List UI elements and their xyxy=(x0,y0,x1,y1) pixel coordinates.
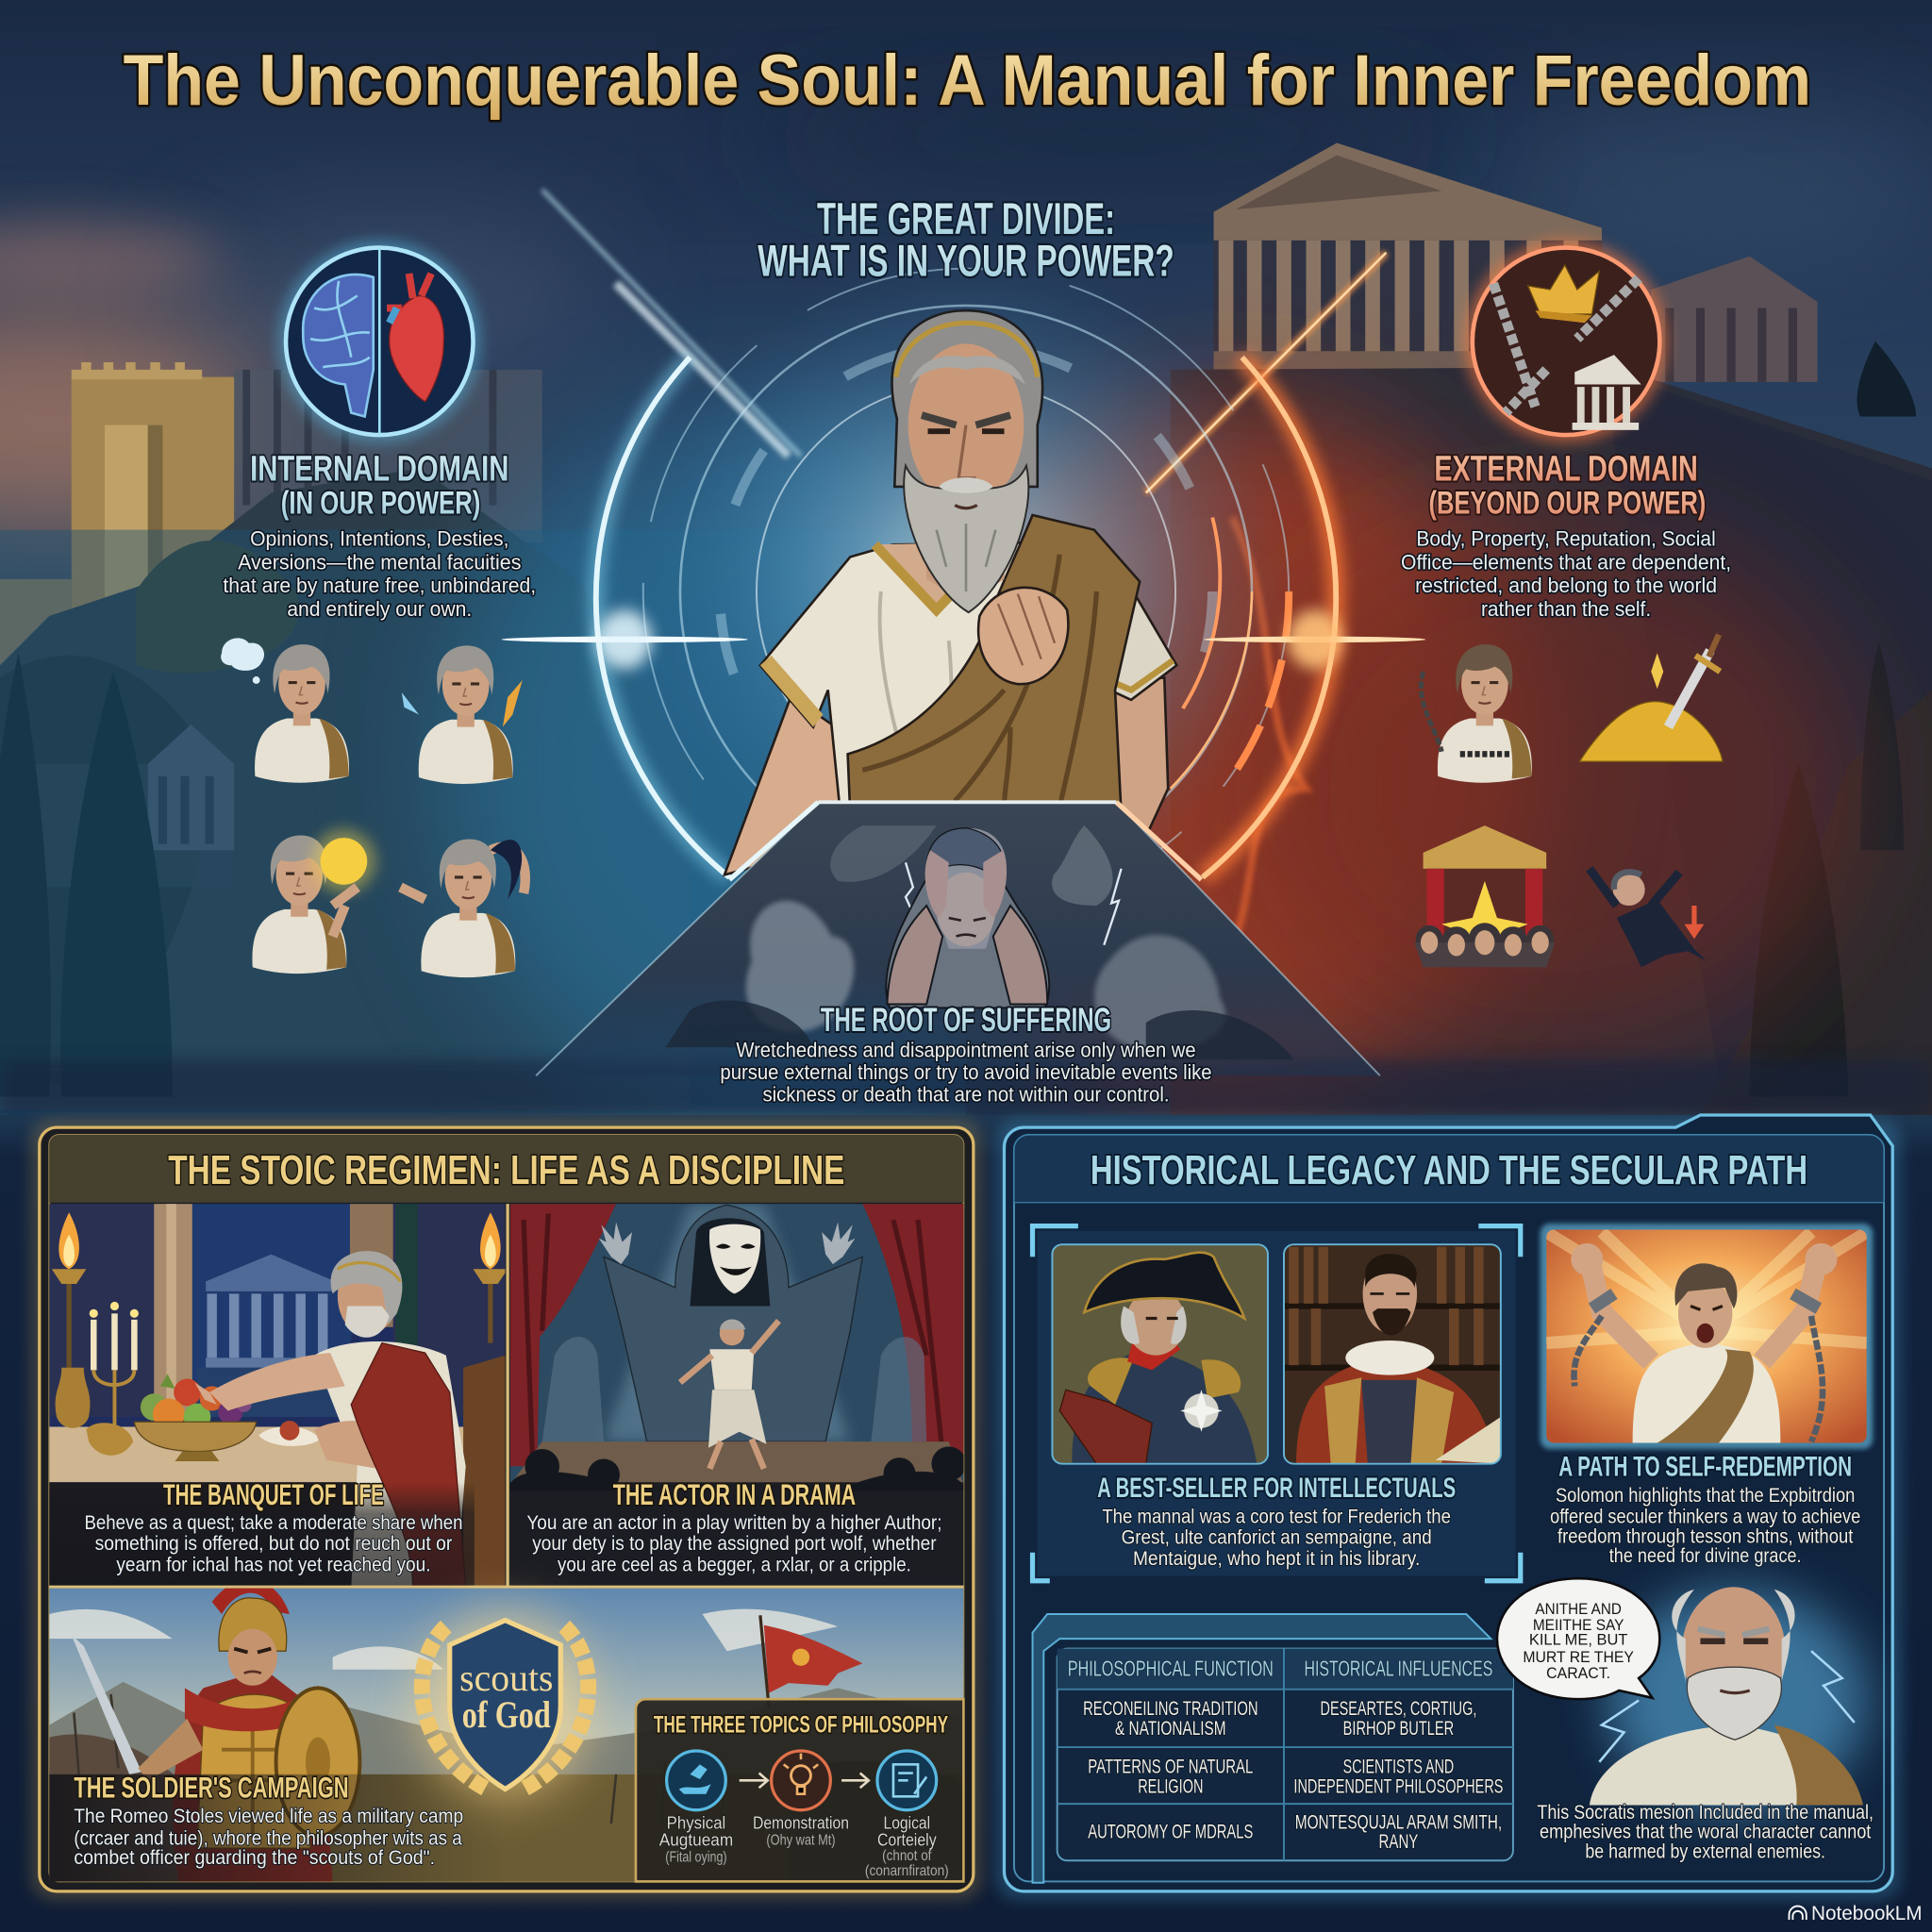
speech bubble: MURT RE THEY xyxy=(1523,1649,1634,1666)
best-seller heading: A BEST-SELLER FOR INTELLECTUALS xyxy=(1097,1473,1456,1504)
icon: chained figure xyxy=(1421,644,1532,783)
central philosopher xyxy=(724,310,1176,874)
suffering text: pursue external things or try to avoid inevitable events like xyxy=(720,1060,1212,1084)
socrates portrait xyxy=(1497,1578,1867,1811)
speech bubble: MEIITHE SAY xyxy=(1533,1617,1624,1634)
topic labels: Demonstration xyxy=(753,1812,849,1832)
icon: figure thinking xyxy=(221,638,349,783)
table row 2 xyxy=(1088,1757,1503,1797)
internal domain text: and entirely our own. xyxy=(287,597,472,621)
banquet text: Beheve as a quest; take a moderate share when xyxy=(84,1512,462,1534)
panel: three topics of philosophy xyxy=(636,1699,963,1881)
soldier text xyxy=(74,1806,463,1869)
table row 1 xyxy=(1083,1698,1476,1740)
scene: breaking chains xyxy=(1541,1224,1873,1449)
banquet heading: THE BANQUET OF LIFE xyxy=(163,1478,384,1511)
best-seller text xyxy=(1102,1506,1451,1570)
external domain text: Office—elements that are dependent, xyxy=(1401,550,1731,574)
scenic background: dusk sky, acropolis and cliffs xyxy=(0,86,1932,1122)
topic labels: Logical xyxy=(883,1812,930,1832)
legacy header band xyxy=(1014,1135,1884,1203)
topic labels xyxy=(659,1812,949,1879)
beard xyxy=(904,466,1028,612)
topic labels: (Fital oying) xyxy=(665,1850,727,1866)
table row 2: INDEPENDENT PHILOSOPHERS xyxy=(1293,1775,1503,1797)
hair back xyxy=(891,310,1042,487)
heart xyxy=(390,295,443,402)
great divide heading: THE GREAT DIVIDE: xyxy=(817,193,1115,243)
icon: demonstration xyxy=(772,1751,830,1810)
icon: crown chains and temple circle xyxy=(1465,241,1667,442)
icon: figure reaching for golden orb xyxy=(252,829,375,974)
suffering text: sickness or death that are not within our control. xyxy=(762,1083,1170,1107)
stage xyxy=(510,1441,963,1485)
suffering text: Wretchedness and disappointment arise only when we xyxy=(736,1039,1196,1062)
speech bubble: ANITHE AND xyxy=(1535,1601,1622,1618)
external domain heading: (BEYOND OUR POWER) xyxy=(1428,486,1706,522)
table row 2: RELIGION xyxy=(1138,1775,1203,1797)
icon: falling man in suit xyxy=(1590,869,1707,967)
table row 1: & NATIONALISM xyxy=(1115,1718,1226,1740)
table row 3: RANY xyxy=(1379,1831,1418,1853)
table headers: HISTORICAL INFLUENCES xyxy=(1305,1656,1492,1680)
banquet text: something is offered, but do not reuch out or xyxy=(95,1533,452,1555)
internal domain text: that are by nature free, unbindared, xyxy=(223,574,536,597)
table row 3 xyxy=(1088,1811,1502,1853)
soldier text: combet officer guarding the "scouts of God". xyxy=(74,1847,435,1869)
icon: brain and heart circle xyxy=(278,241,480,442)
neck xyxy=(924,518,1008,604)
tragicomic mask xyxy=(709,1224,760,1293)
badge: scouts of god laurel shield xyxy=(419,1611,591,1796)
table row 3: MONTESQUJAL ARAM SMITH, xyxy=(1295,1811,1502,1833)
external domain heading: EXTERNAL DOMAIN xyxy=(1434,449,1698,489)
soldier text: (crcaer and tuie), whore the philosopher wits as a xyxy=(74,1827,462,1849)
flag xyxy=(760,1615,769,1707)
sword xyxy=(72,1635,142,1774)
actor heading: THE ACTOR IN A DRAMA xyxy=(613,1478,856,1511)
table headers: PHILOSOPHICAL FUNCTION xyxy=(1068,1656,1274,1680)
external domain text: restricted, and belong to the world xyxy=(1415,574,1717,597)
icon: figure pushing away xyxy=(400,839,525,977)
curtains xyxy=(510,1204,616,1466)
table row 1: DESEARTES, CORTIUG, xyxy=(1321,1698,1476,1720)
badge: scouts of god laurel shield: scouts xyxy=(459,1657,553,1699)
arrow xyxy=(740,1774,768,1788)
topic labels: (chnot of xyxy=(882,1848,932,1864)
socrates text xyxy=(1537,1802,1874,1863)
icon: physical xyxy=(667,1751,725,1810)
table row 2: PATTERNS OF NATURAL xyxy=(1088,1757,1253,1778)
topic labels: (Ohy wat Mt) xyxy=(766,1832,836,1848)
face xyxy=(908,343,1024,507)
brows and eyes xyxy=(922,415,1010,425)
actor text: your dety is to play the assigned port wolf, whether xyxy=(532,1533,937,1555)
self-redemption text: offered seculer thinkers a way to achieve xyxy=(1550,1506,1860,1527)
candelabra xyxy=(56,1302,139,1456)
portrait: montaigne xyxy=(1284,1244,1501,1464)
great divide heading: WHAT IS IN YOUR POWER? xyxy=(758,236,1174,286)
left buildings and hills xyxy=(234,370,542,542)
soldier text: The Romeo Stoles viewed life as a military camp xyxy=(74,1806,463,1827)
brown drape xyxy=(848,515,1140,813)
right parthenon xyxy=(1214,143,1818,382)
right sleeve xyxy=(1096,560,1176,700)
icon: figure with intent xyxy=(402,645,523,784)
brain xyxy=(303,275,374,416)
table row 3: AUTOROMY OF MDRALS xyxy=(1088,1822,1253,1843)
banquet text xyxy=(84,1512,462,1575)
topic labels: Corteiely xyxy=(877,1830,937,1850)
suffering heading: THE ROOT OF SUFFERING xyxy=(821,1002,1111,1039)
best-seller text: The mannal was a coro test for Frederich the xyxy=(1102,1506,1451,1527)
speech bubble xyxy=(1497,1578,1659,1699)
internal domain heading: (IN OUR POWER) xyxy=(281,486,480,522)
storm clouds xyxy=(665,825,1293,1059)
socrates text: be harmed by external enemies. xyxy=(1585,1841,1825,1863)
best-seller text: Mentaigue, who hept it in his library. xyxy=(1133,1548,1420,1570)
table row 1: RECONEILING TRADITION xyxy=(1083,1698,1258,1720)
self-redemption text: the need for divine grace. xyxy=(1609,1545,1802,1567)
speech bubble: KILL ME, BUT xyxy=(1529,1632,1627,1649)
flames and torches xyxy=(58,1212,501,1269)
self-redemption text xyxy=(1550,1485,1860,1567)
table: philosophical function and influences xyxy=(1033,1614,1513,1883)
despairing figure xyxy=(886,828,1049,1008)
internal domain heading xyxy=(250,449,508,522)
socrates text: This Socratis mesion Included in the manual, xyxy=(1537,1802,1874,1824)
colour wash: blue and red halves xyxy=(0,530,966,1115)
scene: actor in a drama xyxy=(510,1204,966,1586)
topic labels: (conarnfiraton) xyxy=(865,1863,949,1879)
actor text xyxy=(526,1512,942,1575)
internal domain text: Aversions—the mental facuities xyxy=(238,550,521,574)
table row 2: SCIENTISTS AND xyxy=(1343,1757,1454,1778)
left arm xyxy=(724,696,841,874)
internal domain heading: INTERNAL DOMAIN xyxy=(250,449,508,489)
title: The Unconquerable Soul: A Manual for Inner Freedom xyxy=(124,41,1811,121)
portrait: frederick the great xyxy=(1052,1244,1268,1464)
central glow and light rings xyxy=(502,190,1425,914)
stoic header band xyxy=(49,1135,963,1203)
roman soldier xyxy=(138,1579,359,1881)
icon: theatre with crowd xyxy=(1414,825,1555,967)
icon: gold and sword xyxy=(1579,635,1723,761)
best-seller text: Grest, ulte canforict an sempaigne, and xyxy=(1122,1527,1432,1549)
self-redemption text: freedom through tesson shtns, without xyxy=(1557,1525,1854,1547)
banquet man xyxy=(194,1251,466,1590)
panel: historical legacy xyxy=(995,1115,1901,1900)
self-redemption text: Solomon highlights that the Expbitrdion xyxy=(1556,1485,1855,1507)
arrow xyxy=(841,1774,869,1788)
internal domain text: Opinions, Intentions, Desties, xyxy=(250,527,508,551)
topic labels: Augtueam xyxy=(659,1830,733,1850)
panel: the stoic regimen xyxy=(31,1119,982,1900)
panel: best-seller frame xyxy=(1033,1226,1521,1581)
socrates text: emphesives that the woral character cannot xyxy=(1540,1822,1872,1843)
topic labels: Physical xyxy=(667,1812,725,1832)
chair xyxy=(463,1356,506,1586)
table row 1: BIRHOP BUTLER xyxy=(1343,1718,1454,1740)
great divide heading xyxy=(758,193,1174,286)
icon: logical xyxy=(877,1751,937,1810)
right arm xyxy=(1096,677,1168,850)
panel: the root of suffering xyxy=(536,802,1380,1107)
fruit bowl xyxy=(134,1374,257,1461)
notebooklm badge: NotebookLM xyxy=(1811,1903,1923,1924)
actor text: you are ceel as a begger, a rxlar, or a cripple. xyxy=(558,1554,911,1575)
scene: soldier's campaign xyxy=(49,1579,963,1881)
external domain heading xyxy=(1428,449,1706,522)
scene: banquet of life xyxy=(49,1204,508,1590)
small actor xyxy=(680,1320,778,1469)
table xyxy=(49,1426,475,1482)
soldier heading: THE SOLDIER'S CAMPAIGN xyxy=(74,1772,349,1805)
external domain text xyxy=(1401,527,1731,621)
badge: scouts of god laurel shield: of God xyxy=(462,1693,551,1736)
suffering text xyxy=(720,1039,1212,1107)
banquet text: yearn for ichal has not yet reached you. xyxy=(116,1554,430,1575)
actor text: You are an actor in a play written by a higher Author; xyxy=(526,1512,942,1534)
speech bubble: CARACT. xyxy=(1546,1665,1610,1682)
internal domain text xyxy=(223,527,536,621)
tunic xyxy=(760,542,1059,813)
stoic heading: THE STOIC REGIMEN: LIFE AS A DISCIPLINE xyxy=(168,1148,844,1193)
external domain text: rather than the self. xyxy=(1481,597,1651,621)
external domain text: Body, Property, Reputation, Social xyxy=(1416,527,1716,551)
hand xyxy=(978,588,1068,684)
cypress trees xyxy=(0,653,51,1096)
hooded figure xyxy=(604,1205,862,1441)
three topics heading: THE THREE TOPICS OF PHILOSOPHY xyxy=(654,1712,948,1738)
